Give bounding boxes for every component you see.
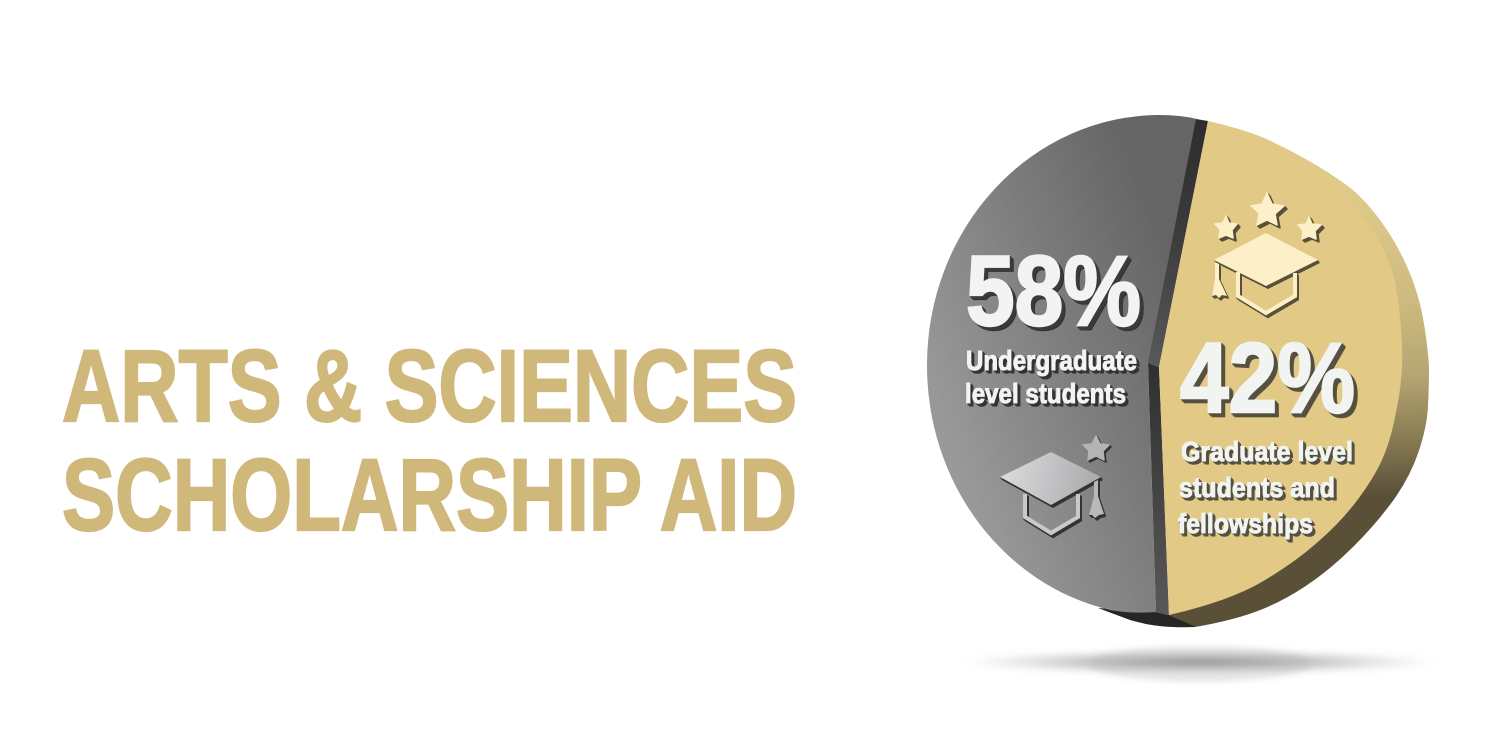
pie chart xyxy=(927,115,1429,627)
stat: 58%: level students xyxy=(965,378,1126,409)
stat: 42% xyxy=(1178,322,1355,539)
stat: 58% xyxy=(965,235,1141,409)
title: SCHOLARSHIP AID xyxy=(62,438,797,552)
floor shadow xyxy=(960,646,1440,682)
title xyxy=(62,329,797,552)
stat: 42%: students and xyxy=(1179,472,1335,503)
gray icon: cap with star xyxy=(1000,436,1109,533)
label: graduate: Graduate level xyxy=(1181,436,1353,467)
stat: 42%: fellowships xyxy=(1178,508,1313,539)
title: ARTS & SCIENCES xyxy=(62,329,797,443)
gold slice face xyxy=(1159,121,1402,615)
stat: 42%: 42% xyxy=(1180,322,1355,433)
gold slice edge xyxy=(1169,121,1429,627)
stars xyxy=(1215,193,1321,239)
gray slice face xyxy=(927,115,1197,613)
graduation cap xyxy=(1212,233,1318,313)
star xyxy=(1083,436,1109,460)
graduation cap xyxy=(1000,452,1104,533)
label: undergraduate: Undergraduate xyxy=(966,345,1137,376)
slice divider wall lower xyxy=(1148,363,1169,615)
gray slice bottom edge xyxy=(1098,608,1196,627)
slice divider wall xyxy=(1148,119,1208,367)
stat: 58%: 58% xyxy=(966,235,1141,346)
gold icon: cap with stars xyxy=(1212,193,1321,313)
